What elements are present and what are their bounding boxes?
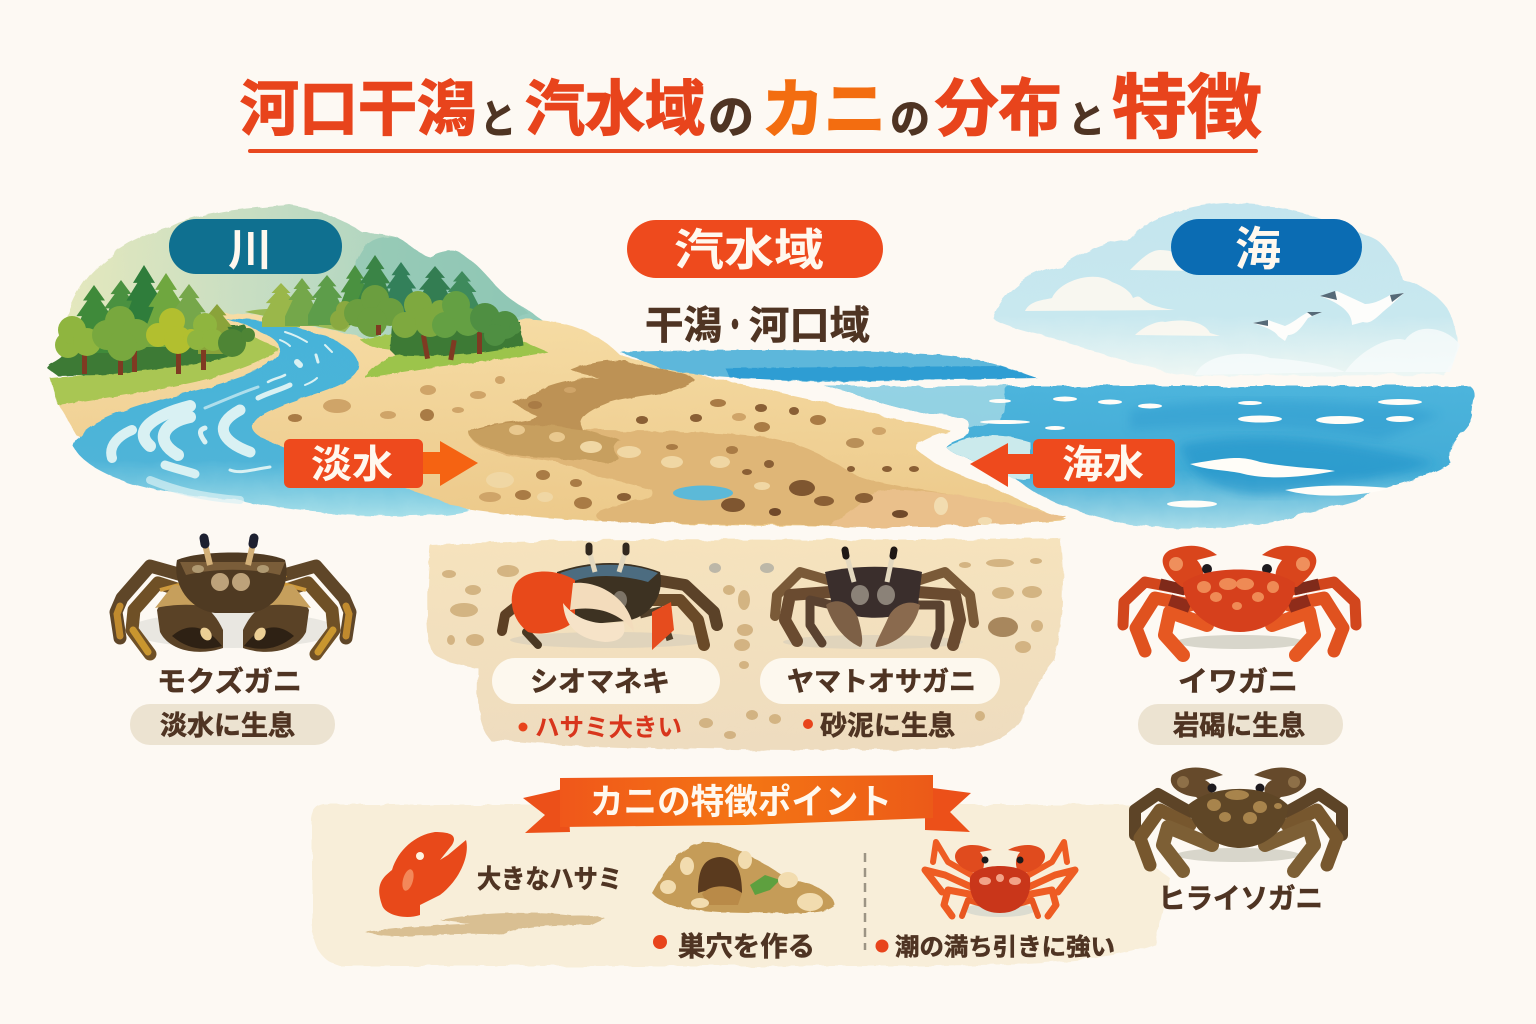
note: 砂泥に生息: 砂泥に生息 <box>820 711 955 741</box>
subheading: 干潟・河口域: ・ <box>723 305 747 348</box>
label pill: 汽水域 <box>627 220 883 278</box>
left forest <box>47 265 255 376</box>
tidal channels <box>469 360 1068 527</box>
note: 巣穴を作る: 巣穴を作る <box>678 932 815 962</box>
grass banks <box>50 333 548 405</box>
name pill: シオマネキ: シオマネキ <box>530 666 670 697</box>
icon: burrow <box>652 842 835 913</box>
label: イワガニ: イワガニ <box>1178 666 1298 697</box>
arrow: 海水 <box>970 439 1175 488</box>
icon: claw <box>379 832 467 917</box>
title: 河口干潟 <box>240 76 476 143</box>
panorama: river, tidal flat and sea scene <box>47 203 1474 528</box>
right forest <box>245 255 523 360</box>
pebbles <box>288 376 992 525</box>
title: 分布 <box>935 75 1062 144</box>
arrow: 淡水 <box>284 439 478 488</box>
name pill: シオマネキ <box>492 658 720 704</box>
title: 汽水域 <box>525 76 705 143</box>
sky with clouds and gulls <box>993 203 1460 376</box>
tidal flat sand <box>57 312 1068 527</box>
arrow: 海水: 海水 <box>1062 444 1144 487</box>
crab: イワガニ <box>1123 546 1356 655</box>
habitat pill: 淡水に生息 <box>130 704 335 745</box>
label: 大きなハサミ: 大きなハサミ <box>477 864 622 894</box>
crab: モクズガニ <box>116 538 350 654</box>
title: の <box>890 96 930 142</box>
habitat pill: 淡水に生息: 淡水に生息 <box>160 711 295 741</box>
tide pool <box>673 486 733 500</box>
title: 特徴 <box>1112 69 1262 147</box>
arrow: 淡水: 淡水 <box>311 444 393 487</box>
title: と <box>1068 100 1105 142</box>
river <box>74 318 470 516</box>
crab: ヤマトオサガニ <box>775 550 974 649</box>
note: 潮の満ち引きに強い: 潮の満ち引きに強い <box>895 934 1115 961</box>
label pill: 川: 川 <box>228 226 272 275</box>
habitat pill: 岩碣に生息 <box>1138 704 1343 745</box>
icon: small red crab <box>925 842 1075 917</box>
title: カニ <box>762 74 886 146</box>
subheading: 干潟・河口域: 河口域 <box>749 305 870 348</box>
panel: tidal flat crabs <box>427 538 1063 750</box>
title: と <box>480 98 516 142</box>
label pill: 汽水域: 汽水域 <box>674 226 824 275</box>
title <box>240 69 1262 147</box>
label: ヒライソガニ: ヒライソガニ <box>1158 883 1323 914</box>
label pill: 海 <box>1171 219 1362 275</box>
habitat pill: 岩碣に生息: 岩碣に生息 <box>1173 711 1305 741</box>
subheading: 干潟・河口域: 干潟 <box>645 305 722 348</box>
distant sea <box>620 350 1037 382</box>
subheading: 干潟・河口域 <box>645 305 870 348</box>
crab: ヒライソガニ <box>1135 768 1342 871</box>
hills behind the river <box>63 205 545 380</box>
panel: crab feature points <box>312 775 1170 966</box>
label pill: 川 <box>169 219 342 275</box>
ribbon heading: カニの特徴ポイント <box>590 783 892 822</box>
label pill: 海: 海 <box>1235 223 1281 275</box>
sand specks <box>442 558 1043 739</box>
name pill: ヤマトオサガニ <box>760 658 1000 704</box>
divider dashed line <box>864 853 866 950</box>
crab: シオマネキ <box>502 546 717 650</box>
sand trail <box>365 913 605 936</box>
title: の <box>708 91 754 143</box>
note: ハサミ大きい: ハサミ大きい <box>535 714 682 742</box>
title underline <box>248 149 1258 153</box>
ribbon heading <box>523 775 971 833</box>
name pill: ヤマトオサガニ: ヤマトオサガニ <box>787 667 976 697</box>
label: モクズガニ: モクズガニ <box>157 665 302 697</box>
sea <box>824 386 1474 528</box>
